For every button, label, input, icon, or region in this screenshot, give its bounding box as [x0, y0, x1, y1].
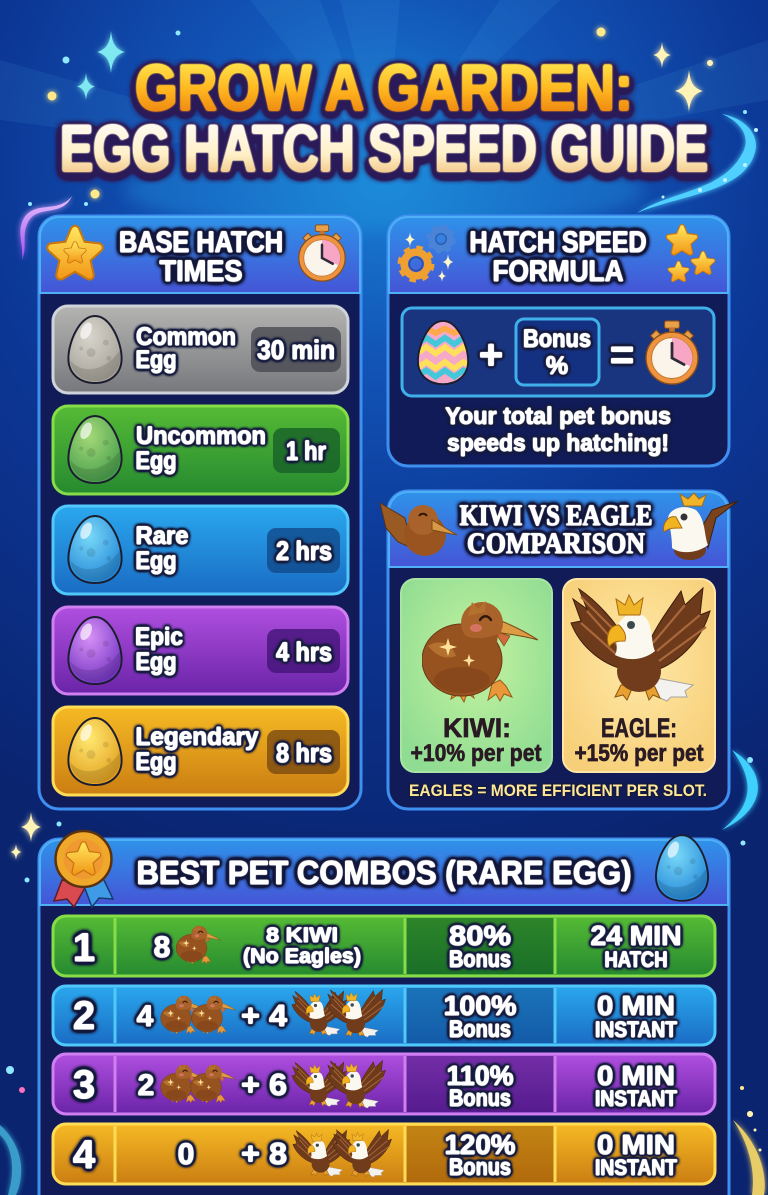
row: epic egg [53, 607, 348, 694]
panel header: base hatch times [40, 217, 360, 293]
row: rare egg: Rare [136, 522, 189, 550]
row 2: 4 kiwi plus 4 eagle: INSTANT [595, 1017, 677, 1042]
blue swirl lower right [722, 750, 758, 830]
row 4: 0 kiwi plus 8 eagle: Bonus [449, 1154, 511, 1181]
row 1: 8 kiwi: 80% [449, 920, 511, 951]
panel header: kiwi vs eagle [389, 492, 728, 567]
plus sign: + [479, 331, 503, 378]
blue swirl top right [637, 114, 758, 213]
row 2: 4 kiwi plus 4 eagle: 0 MIN [597, 990, 675, 1021]
row: rare egg: 2 hrs [276, 536, 332, 566]
row: epic egg: Egg [136, 648, 176, 676]
icon: eagle head with crown [664, 493, 738, 560]
kiwi stats: KIWI: [443, 713, 511, 743]
row 3: 2 kiwi plus 6 eagle: Bonus [449, 1085, 511, 1112]
row: rare egg: Egg [136, 547, 176, 575]
eagle stats [574, 713, 704, 767]
kiwi stats: +10% per pet [410, 740, 542, 767]
row 1: 8 kiwi: 1 [73, 926, 95, 970]
formula caption: Your total pet bonus [445, 403, 671, 430]
row 2: 4 kiwi plus 4 eagle: Bonus [449, 1016, 511, 1043]
row 3: 2 kiwi plus 6 eagle: 2 [138, 1069, 154, 1102]
row: common egg: 30 min [257, 335, 335, 365]
panel: kiwi vs eagle comparison [380, 491, 738, 809]
row: epic egg: Epic [135, 623, 183, 651]
row 1: 8 kiwi: 24 MIN [590, 920, 682, 951]
panel header: hatch speed formula [389, 217, 728, 293]
kiwi illustration [422, 601, 538, 702]
row 4: 0 kiwi plus 8 eagle: 4 [73, 1133, 96, 1177]
row 1: 8 kiwi: HATCH [604, 947, 668, 972]
formula caption: speeds up hatching! [447, 430, 669, 457]
row: legendary egg: Legendary [136, 723, 259, 751]
panel header: best pet combos [40, 840, 728, 905]
heading: hatch speed formula [470, 226, 646, 288]
panel: hatch speed formula [388, 216, 729, 466]
row 1: 8 kiwi [53, 916, 715, 976]
card: eagle [563, 579, 715, 772]
row 3: 2 kiwi plus 6 eagle [53, 1054, 715, 1114]
row 2: 4 kiwi plus 4 eagle: 4 [137, 1000, 154, 1033]
row 3: 2 kiwi plus 6 eagle: INSTANT [595, 1086, 677, 1111]
icon: easter egg [417, 320, 473, 385]
purple swirl left [20, 196, 72, 260]
row 4: 0 kiwi plus 8 eagle [53, 1124, 715, 1184]
row 4: 0 kiwi plus 8 eagle: 120% [444, 1129, 516, 1160]
row: rare egg [53, 506, 348, 594]
bonus box: Bonus [523, 325, 591, 353]
row: uncommon egg: Egg [136, 447, 176, 475]
row: uncommon egg: 1 hr [286, 436, 326, 466]
heading: base hatch times [119, 226, 283, 288]
row: common egg: Egg [136, 346, 176, 374]
row 1: 8 kiwi: (No Eagles) [243, 945, 361, 968]
icon: stopwatch [299, 225, 345, 281]
row 2: 4 kiwi plus 4 eagle [53, 986, 715, 1045]
row: uncommon egg: Uncommon [136, 422, 266, 450]
row: common egg: Common [136, 323, 236, 351]
heading: kiwi vs eagle: COMPARISON [467, 527, 645, 560]
card: kiwi [401, 579, 552, 772]
row 3: 2 kiwi plus 6 eagle: 110% [446, 1060, 514, 1091]
row 4: 0 kiwi plus 8 eagle: 0 [178, 1138, 194, 1171]
icon: stars [669, 227, 713, 280]
heading: hatch speed formula: HATCH SPEED [470, 226, 646, 259]
heading: base hatch times: TIMES [160, 255, 242, 288]
heading: best pet combos: BEST PET COMBOS (RARE EGG) [136, 854, 632, 891]
title [60, 51, 708, 185]
heading: hatch speed formula: FORMULA [492, 255, 624, 288]
row 1: 8 kiwi: Bonus [449, 946, 511, 973]
cyan swirl bottom left [0, 1125, 21, 1195]
bonus box [516, 319, 599, 385]
row 2: 4 kiwi plus 4 eagle: 100% [444, 990, 517, 1021]
icon: stopwatch [646, 321, 698, 384]
row 1: 8 kiwi: 8 KIWI [266, 924, 338, 947]
row 4: 0 kiwi plus 8 eagle: + 8 [241, 1136, 287, 1171]
row: epic egg: 4 hrs [276, 637, 332, 667]
row: legendary egg: 8 hrs [276, 738, 332, 768]
row 2: 4 kiwi plus 4 eagle: + 4 [241, 998, 288, 1033]
comparison caption: EAGLES = MORE EFFICIENT PER SLOT. [409, 781, 707, 800]
formula box [402, 308, 714, 396]
row: legendary egg: Egg [136, 748, 176, 776]
row 1: 8 kiwi: 8 [154, 931, 170, 964]
heading: kiwi vs eagle: KIWI VS EAGLE [460, 499, 652, 532]
panel: best pet combos [39, 831, 729, 1195]
row 2: 4 kiwi plus 4 eagle: 2 [73, 994, 95, 1038]
row 4: 0 kiwi plus 8 eagle: 0 MIN [597, 1129, 675, 1160]
icon: rare egg [656, 835, 708, 901]
row: uncommon egg [53, 406, 348, 494]
icon: medal [54, 831, 113, 907]
eagle stats: +15% per pet [574, 740, 704, 767]
gold swirl bottom right [733, 1111, 765, 1195]
title: GROW A GARDEN: [135, 51, 633, 124]
icon: gold star [52, 230, 98, 275]
row: legendary egg [53, 707, 348, 795]
row 3: 2 kiwi plus 6 eagle: 3 [73, 1063, 95, 1107]
row 4: 0 kiwi plus 8 eagle: INSTANT [595, 1155, 677, 1180]
row 3: 2 kiwi plus 6 eagle: + 6 [241, 1067, 287, 1102]
kiwi stats [410, 713, 542, 767]
icon: kiwi head with wing [380, 503, 457, 556]
eagle stats: EAGLE: [601, 713, 677, 743]
panel: base hatch times [39, 216, 361, 809]
row: common egg [53, 306, 348, 393]
heading: base hatch times: BASE HATCH [119, 226, 283, 259]
heading: kiwi vs eagle [460, 499, 652, 560]
equals sign: = [610, 331, 634, 378]
row 3: 2 kiwi plus 6 eagle: 0 MIN [597, 1060, 675, 1091]
formula caption [445, 403, 671, 457]
bonus box: % [546, 352, 568, 380]
eagle illustration [571, 588, 710, 701]
icon: gears and sparkles [401, 227, 453, 282]
